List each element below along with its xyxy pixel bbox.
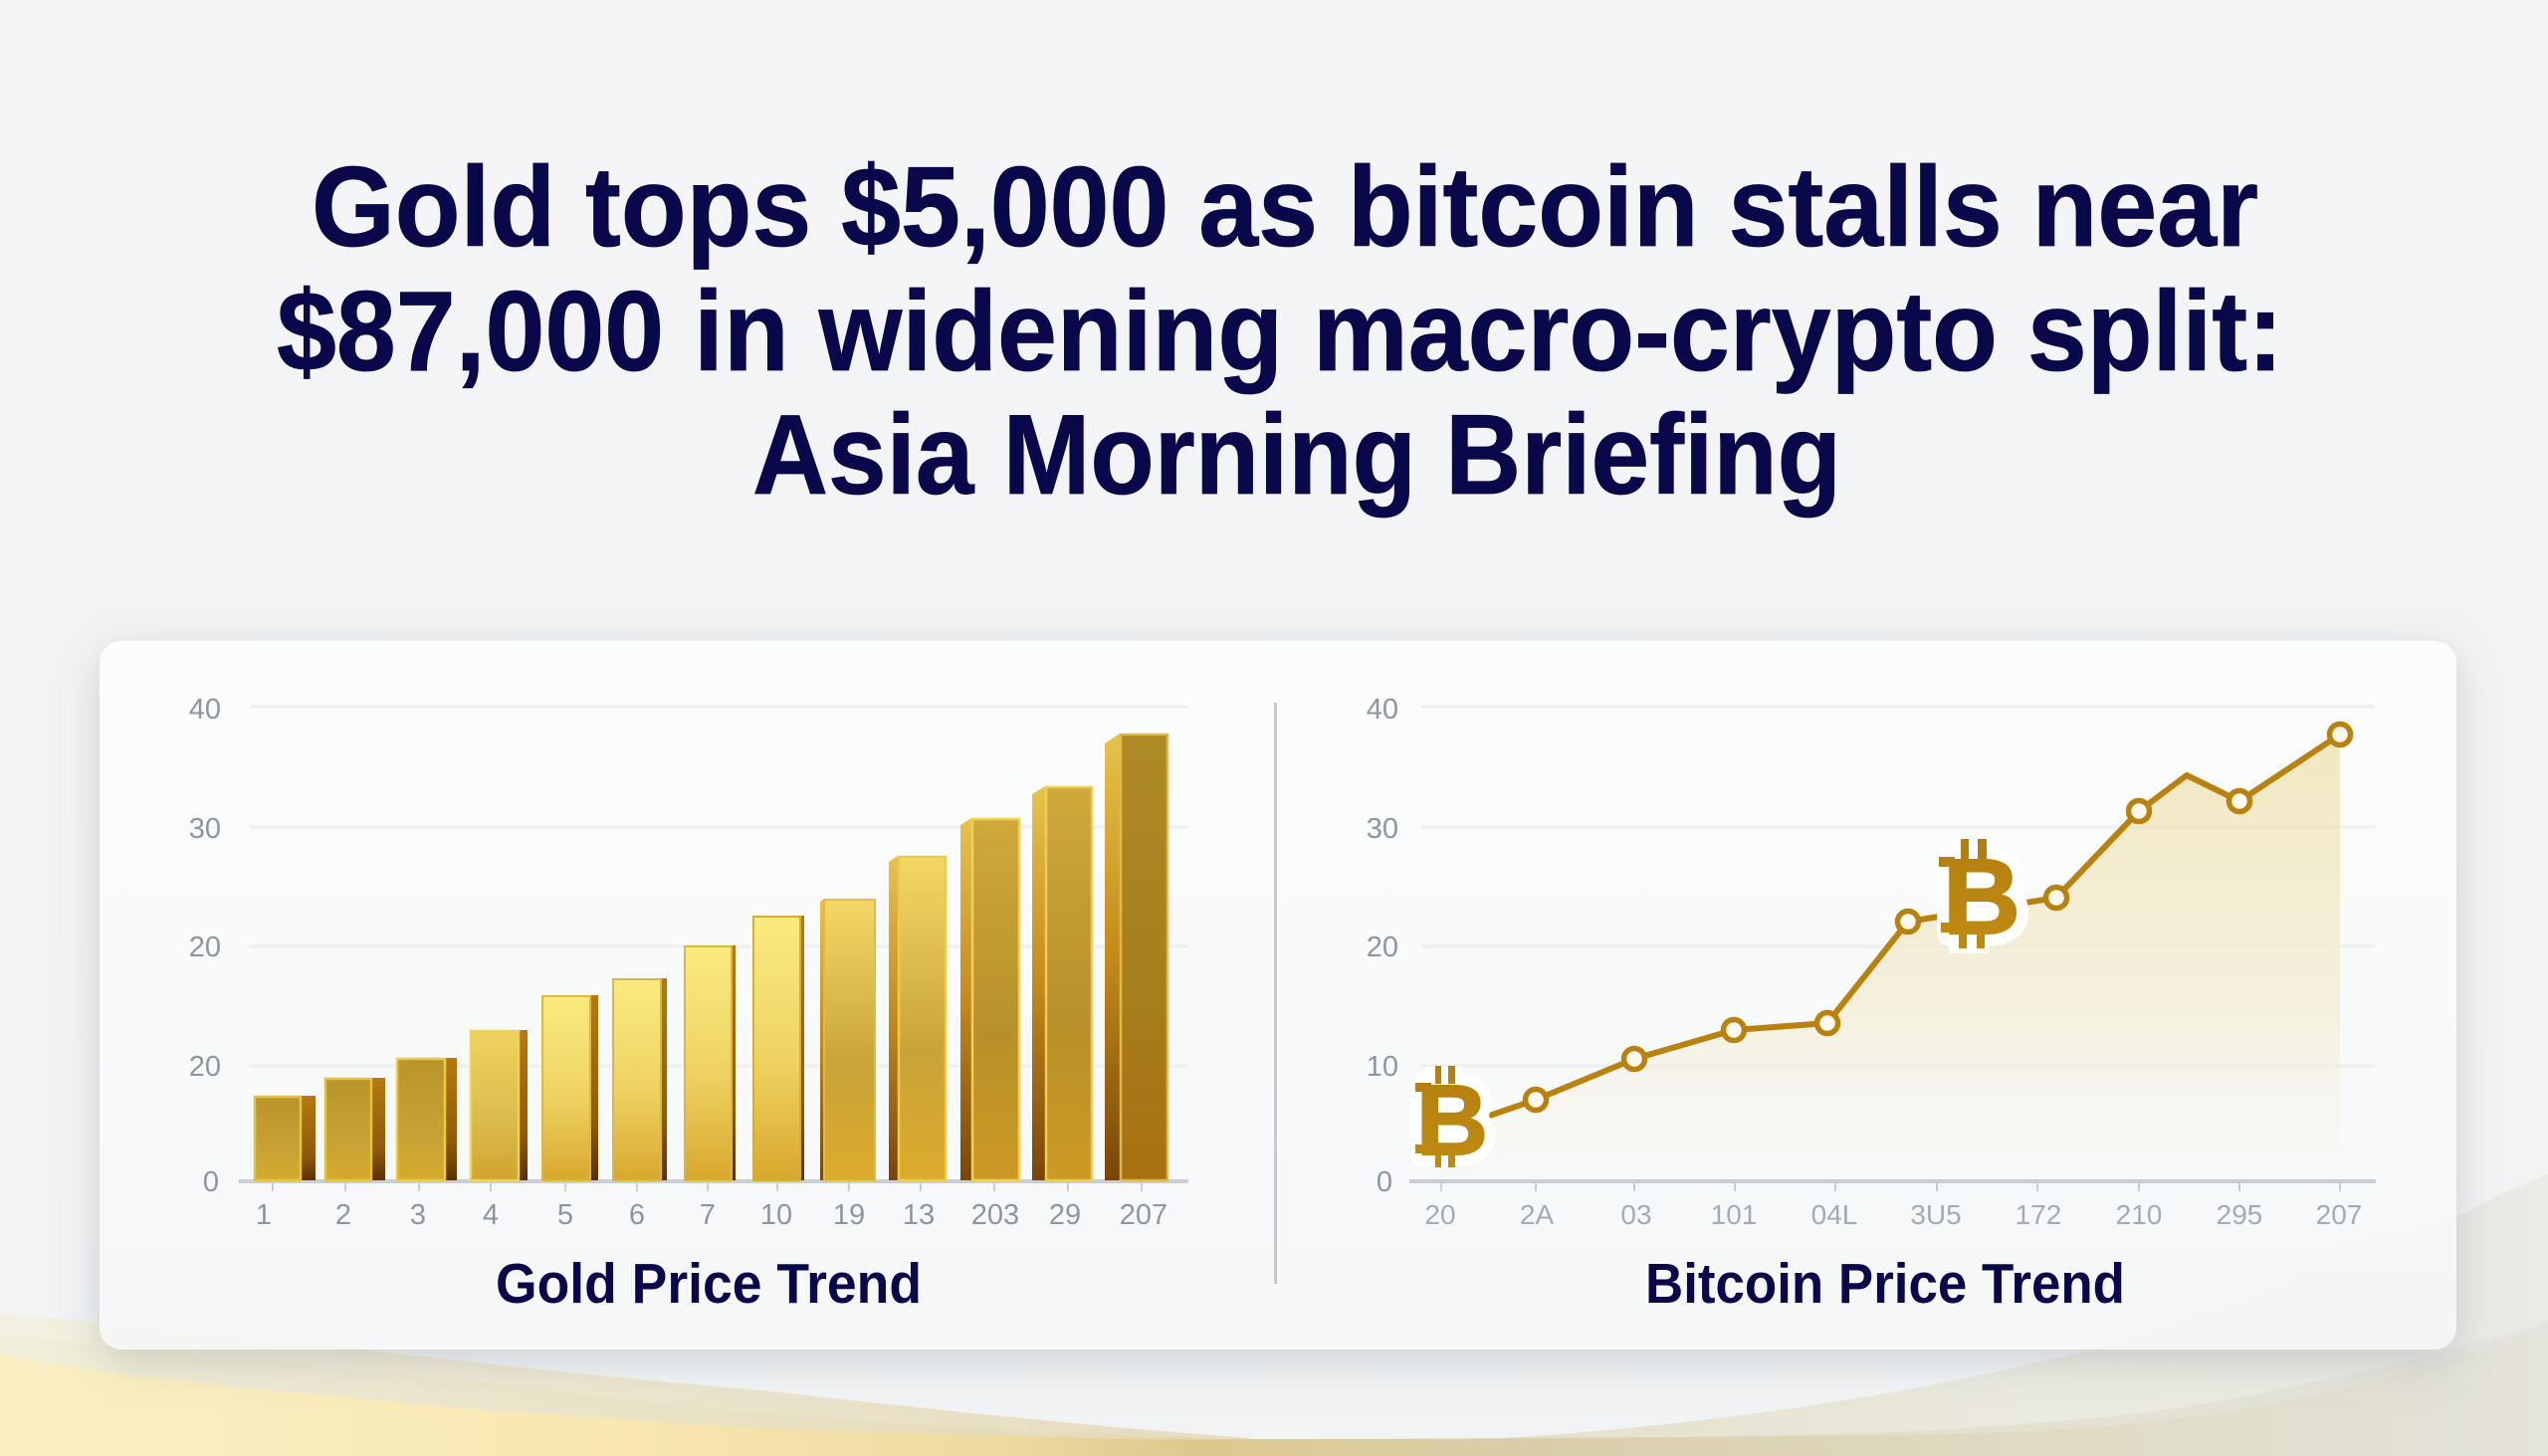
bitcoin chart axes and grid: 04L: [1811, 1199, 1857, 1230]
title: $87,000 in widening macro-crypto split:: [277, 269, 2283, 395]
bitcoin chart axes and grid: 40: [1367, 694, 1398, 726]
gold chart axes and grid: 10: [760, 1199, 792, 1231]
gold chart axes and grid: 20: [189, 932, 221, 963]
bitcoin price line: [1449, 725, 2351, 1130]
gold chart axes and grid: 203: [971, 1199, 1019, 1231]
gold chart axes and grid: 7: [700, 1199, 716, 1231]
panel: bitcoin price chart: [1367, 694, 2376, 1316]
bitcoin chart axes and grid: 207: [2316, 1199, 2362, 1230]
divider: [1274, 703, 1277, 1284]
gold chart axes and grid: 19: [833, 1199, 865, 1231]
icon: bitcoin symbol start: B: [1416, 1065, 1488, 1176]
bitcoin chart axes and grid: 2A: [1520, 1199, 1554, 1230]
bitcoin chart axes and grid: 20: [1424, 1199, 1456, 1230]
bitcoin chart caption: Bitcoin Price Trend: [1645, 1252, 2125, 1316]
bitcoin chart axes and grid: 0: [1377, 1166, 1392, 1198]
gold chart axes and grid: 207: [1120, 1199, 1168, 1231]
title: Gold tops $5,000 as bitcoin stalls near: [312, 144, 2258, 271]
bitcoin chart axes and grid: 210: [2116, 1199, 2162, 1230]
icon: bitcoin symbol middle: B: [1943, 836, 2020, 956]
gold chart axes and grid: [189, 694, 1188, 1231]
gold chart axes and grid: 0: [203, 1166, 219, 1198]
bottom decorative waves: [0, 1174, 2548, 1456]
gold chart axes and grid: 20: [189, 1051, 221, 1083]
bitcoin chart axes and grid: 101: [1711, 1199, 1757, 1230]
gold chart axes and grid: 6: [629, 1199, 645, 1231]
panel: gold price chart: [189, 694, 1188, 1316]
gold chart axes and grid: 1: [256, 1199, 272, 1231]
area under bitcoin line: [1449, 734, 2340, 1181]
gold chart axes and grid: 2: [335, 1199, 351, 1231]
bitcoin chart axes and grid: 20: [1367, 932, 1398, 963]
bitcoin chart axes and grid: 295: [2217, 1199, 2262, 1230]
gold chart axes and grid: 3: [410, 1199, 426, 1231]
bitcoin chart axes and grid: 3U5: [1910, 1199, 1962, 1230]
icon: bitcoin symbol start: B: [1416, 1065, 1488, 1176]
bitcoin chart axes and grid: 03: [1620, 1199, 1652, 1230]
gold bars: [255, 733, 1168, 1180]
gold chart axes and grid: 40: [189, 694, 221, 726]
bitcoin chart axes and grid: 10: [1367, 1051, 1398, 1083]
title: Asia Morning Briefing: [752, 392, 1841, 519]
gold chart axes and grid: 5: [557, 1199, 573, 1231]
bitcoin chart axes and grid: 30: [1367, 813, 1398, 845]
panel: charts card: [100, 641, 2456, 1350]
gold chart axes and grid: 30: [189, 813, 221, 845]
gold chart axes and grid: 4: [483, 1199, 499, 1231]
gold chart axes and grid: 29: [1049, 1199, 1081, 1231]
icon: bitcoin symbol middle: B: [1943, 836, 2020, 956]
gold chart caption: Gold Price Trend: [496, 1252, 922, 1316]
bitcoin chart axes and grid: [1367, 694, 2376, 1230]
gold chart axes and grid: 13: [903, 1199, 935, 1231]
title: [277, 144, 2283, 519]
bitcoin chart axes and grid: 172: [2016, 1199, 2061, 1230]
